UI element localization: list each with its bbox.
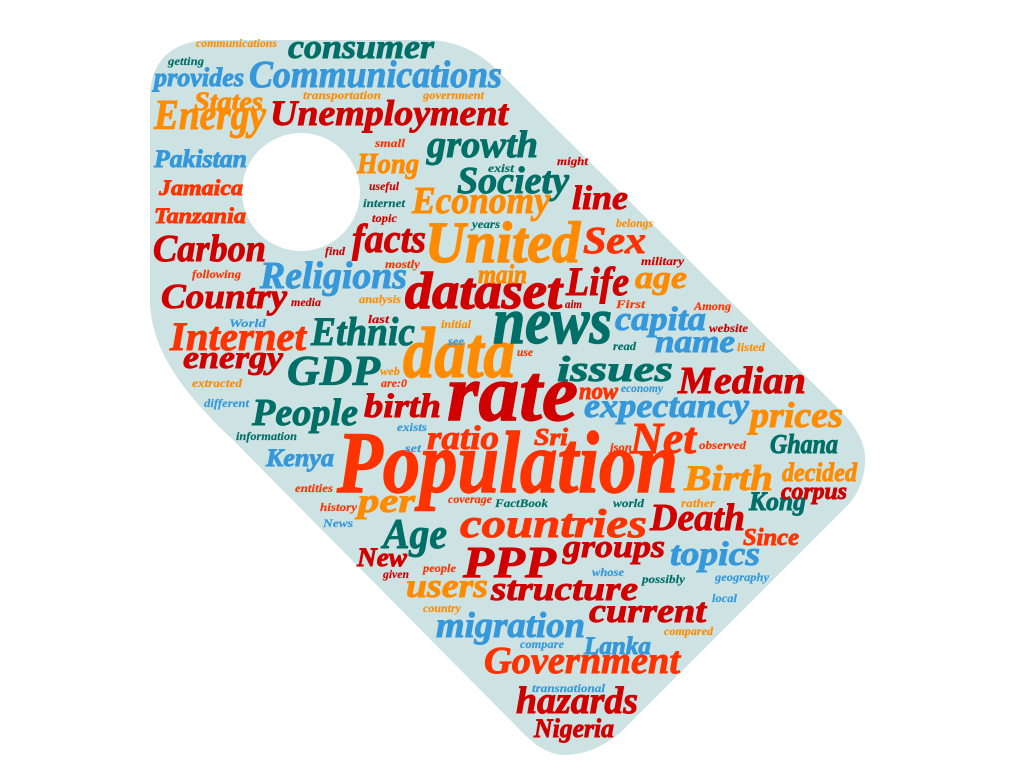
medium words: Government bbox=[484, 640, 681, 682]
medium words: Lanka bbox=[583, 633, 651, 660]
medium words: capita bbox=[615, 301, 706, 338]
medium words: GDP bbox=[287, 349, 380, 395]
small words: see bbox=[447, 334, 465, 348]
medium words: users bbox=[406, 568, 488, 605]
medium words: Tanzania bbox=[154, 203, 246, 228]
small words: News bbox=[322, 516, 353, 530]
medium words: provides bbox=[152, 63, 244, 92]
medium words: Sex bbox=[583, 220, 646, 262]
medium words: People bbox=[251, 392, 358, 434]
medium words: line bbox=[572, 180, 628, 217]
small words: whose bbox=[592, 565, 625, 579]
medium words: per bbox=[354, 483, 416, 520]
medium words: Death bbox=[649, 497, 745, 539]
medium words: Net bbox=[629, 414, 698, 463]
medium words: Communications bbox=[249, 54, 502, 96]
medium words: Internet bbox=[169, 314, 308, 359]
small words: country bbox=[423, 601, 462, 615]
medium words: Hong bbox=[356, 149, 419, 180]
medium words: name bbox=[655, 323, 735, 359]
medium words: expectancy bbox=[584, 388, 750, 425]
small words: internet bbox=[363, 196, 406, 210]
medium words: States bbox=[194, 87, 263, 116]
small words: read bbox=[613, 339, 637, 353]
largest words bbox=[336, 210, 678, 512]
small words: useful bbox=[369, 179, 400, 193]
small words: last bbox=[368, 312, 390, 326]
medium words: main bbox=[478, 260, 527, 289]
medium words: prices bbox=[747, 395, 843, 435]
medium words: decided bbox=[782, 458, 858, 487]
small words: compare bbox=[520, 637, 565, 651]
small words: might bbox=[557, 154, 589, 168]
small words: years bbox=[470, 217, 500, 231]
medium words: Birth bbox=[683, 458, 773, 498]
word: Population: Population bbox=[336, 415, 678, 512]
small words: small bbox=[374, 136, 406, 150]
small words: Among bbox=[693, 299, 731, 313]
medium words: countries bbox=[460, 501, 647, 546]
small words: given bbox=[382, 567, 409, 581]
medium words: Jamaica bbox=[158, 175, 243, 200]
small words: aim bbox=[565, 297, 582, 311]
medium words: Religions bbox=[259, 255, 407, 297]
small words: FactBook bbox=[494, 496, 548, 510]
medium words: energy bbox=[183, 339, 284, 375]
word: rate: rate bbox=[447, 350, 578, 438]
medium words: Nigeria bbox=[533, 714, 614, 743]
small words: listed bbox=[737, 340, 766, 354]
small words: json bbox=[608, 440, 632, 454]
medium words: Carbon bbox=[153, 228, 266, 270]
small words: analysis bbox=[359, 292, 401, 306]
small words: belongs bbox=[616, 216, 653, 230]
medium words: Sri bbox=[534, 425, 568, 451]
small words: compared bbox=[664, 624, 714, 638]
small words: rather bbox=[681, 496, 715, 510]
small words: government bbox=[422, 88, 485, 102]
small words: transnational bbox=[532, 681, 606, 695]
medium words: Life bbox=[565, 259, 629, 304]
medium words: groups bbox=[562, 528, 665, 564]
medium words: now bbox=[579, 379, 619, 405]
medium words: issues bbox=[557, 349, 673, 389]
word: dataset: dataset bbox=[405, 263, 564, 320]
small words: World bbox=[229, 316, 267, 330]
medium words bbox=[152, 29, 858, 743]
small words: use bbox=[517, 345, 534, 359]
small words: history bbox=[320, 500, 358, 514]
small words: website bbox=[709, 321, 749, 335]
small words: transportation bbox=[303, 88, 381, 102]
small words: military bbox=[641, 254, 685, 268]
small words: possibly bbox=[641, 572, 686, 586]
medium words: hazards bbox=[516, 680, 638, 722]
medium words: ratio bbox=[427, 420, 499, 457]
small words: mostly bbox=[385, 257, 421, 271]
small words: media bbox=[291, 295, 321, 309]
small words: initial bbox=[441, 317, 472, 331]
medium words: New bbox=[356, 543, 408, 572]
small words: information bbox=[236, 429, 297, 443]
small words: topic bbox=[372, 211, 398, 225]
small words: extracted bbox=[192, 376, 243, 390]
word: data: data bbox=[403, 313, 515, 393]
medium words: Unemployment bbox=[270, 93, 509, 133]
small words: exists bbox=[397, 420, 427, 434]
small words: following bbox=[192, 267, 241, 281]
small words: local bbox=[712, 591, 738, 605]
small words: observed bbox=[699, 438, 747, 452]
medium words: Median bbox=[677, 360, 806, 402]
small words: find bbox=[325, 244, 346, 258]
small words: people bbox=[422, 561, 457, 575]
medium words: Ghana bbox=[770, 429, 838, 459]
tag shape background bbox=[150, 40, 865, 755]
medium words: Kenya bbox=[265, 445, 334, 472]
medium words: growth bbox=[426, 124, 538, 166]
small words: getting bbox=[167, 54, 204, 68]
small words: economy bbox=[621, 381, 664, 395]
small words: different bbox=[204, 396, 250, 410]
medium words: Kong bbox=[748, 487, 806, 516]
medium words: corpus bbox=[781, 479, 847, 505]
word: United: United bbox=[425, 210, 581, 275]
small words: coverage bbox=[448, 492, 493, 506]
medium words: Since bbox=[743, 525, 799, 551]
small words: exist bbox=[488, 161, 515, 175]
medium words: Energy bbox=[153, 93, 266, 139]
small words: are:0 bbox=[381, 376, 407, 390]
word: news: news bbox=[493, 285, 612, 358]
medium words: Ethnic bbox=[310, 309, 415, 354]
small words: web bbox=[380, 364, 400, 378]
medium words: Economy bbox=[411, 180, 550, 222]
small words: entities bbox=[295, 481, 333, 495]
medium words: Age bbox=[380, 512, 447, 558]
medium words: Country bbox=[161, 277, 287, 316]
small words: communications bbox=[196, 36, 277, 50]
small words: world bbox=[613, 496, 645, 510]
small words: First bbox=[615, 297, 646, 311]
medium words: topics bbox=[670, 536, 760, 573]
medium words: Society bbox=[457, 160, 569, 202]
medium words: Pakistan bbox=[153, 146, 247, 173]
small words: set bbox=[404, 441, 422, 455]
medium words: consumer bbox=[288, 29, 435, 66]
small words: geography bbox=[714, 570, 770, 584]
medium words: current bbox=[589, 593, 708, 630]
medium words: birth bbox=[364, 388, 441, 425]
medium words: facts bbox=[352, 216, 426, 261]
medium words: structure bbox=[490, 571, 638, 608]
medium words: migration bbox=[436, 605, 585, 645]
medium words: PPP bbox=[462, 538, 557, 587]
medium words: age bbox=[635, 259, 687, 295]
small words bbox=[167, 36, 770, 695]
